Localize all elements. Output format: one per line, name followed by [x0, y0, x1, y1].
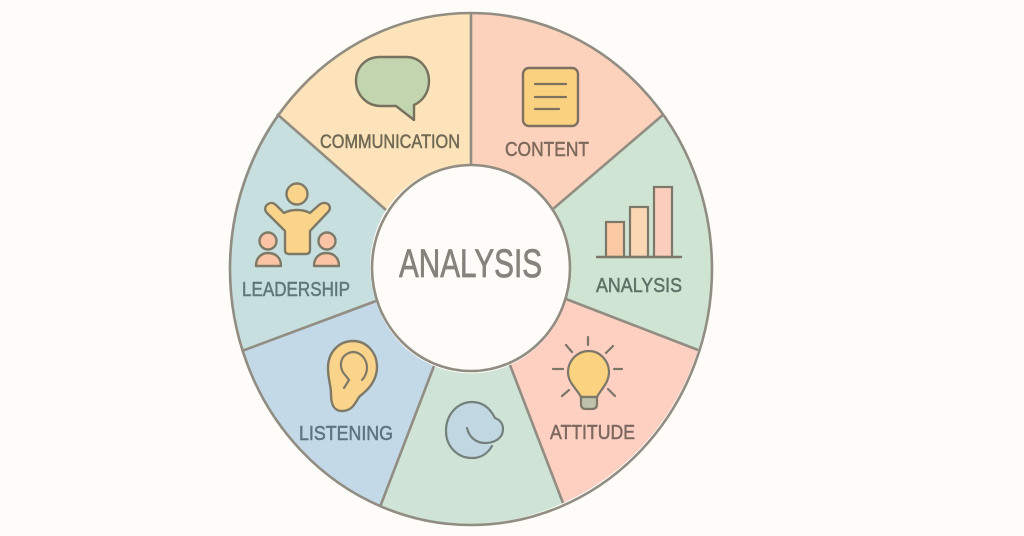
label: attitude: ATTITUDE	[550, 422, 635, 444]
segment: unnamed	[380, 365, 563, 524]
icon: leader with team	[256, 184, 339, 266]
icon: swirl	[446, 402, 503, 458]
segment: analysis	[553, 114, 711, 350]
label: analysis: ANALYSIS	[596, 275, 682, 297]
icon: light bulb	[553, 337, 622, 409]
wheel outlines	[230, 13, 712, 525]
icon: ear	[328, 341, 377, 411]
center circle	[372, 165, 570, 371]
center title: ANALYSIS	[399, 242, 542, 286]
segment: leadership	[229, 114, 386, 351]
label: communication: COMMUNICATION	[320, 132, 460, 153]
segment: communication	[277, 13, 471, 210]
label: content: CONTENT	[505, 139, 589, 161]
segment: content	[471, 13, 664, 209]
icon: bar chart	[597, 187, 681, 257]
icon: speech bubble	[356, 57, 429, 120]
segment: attitude	[510, 299, 698, 503]
icon: document	[523, 68, 578, 126]
label: leadership: LEADERSHIP	[242, 279, 350, 301]
label: listening: LISTENING	[299, 423, 393, 445]
segment: listening	[242, 301, 434, 507]
